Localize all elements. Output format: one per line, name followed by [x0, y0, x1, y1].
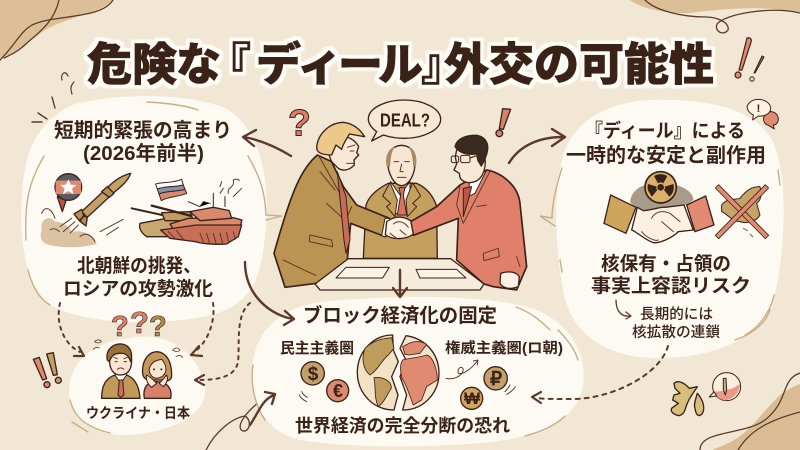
arrow: down to bloc economy — [393, 270, 407, 297]
hand resting on table — [500, 272, 519, 288]
heading: fixed bloc economy: ブロック経済化の固定 — [303, 304, 497, 327]
rouble glyph: ₽ — [490, 369, 502, 390]
icon: worried man and woman — [93, 340, 183, 398]
icon: question marks: ? — [149, 311, 167, 343]
panel: Ukraine and Japan — [33, 305, 205, 435]
text: in the long term: 長期的には — [640, 306, 713, 323]
text: de facto recognition risk: 事実上容認リスク — [591, 275, 751, 297]
icon: small map pieces and pin — [671, 373, 741, 416]
subheading: first half 2026: (2026年前半) — [83, 142, 204, 165]
arrowhead — [191, 346, 202, 356]
icon: tanks with Russian flag — [132, 179, 242, 244]
text: fear of total division: 世界経済の完全分断の恐れ — [295, 416, 510, 436]
panel: temporary stability and side effects — [540, 99, 784, 358]
icon: title exclamation marks — [735, 38, 764, 81]
arrowhead — [74, 347, 84, 356]
text: nuclear proliferation chain: 核拡散の連鎖 — [632, 324, 721, 341]
arrowhead — [532, 392, 541, 403]
icon: question marks: ? — [111, 311, 129, 343]
arrowhead — [195, 375, 204, 385]
icon: rouble and won coins — [446, 360, 515, 409]
central figures: three leaders at a table — [274, 100, 527, 290]
arrow: dotted from side effects to bloc economy — [535, 346, 668, 399]
figure: man in coral suit — [411, 135, 527, 290]
icon: crossed-out map — [715, 185, 769, 239]
arrow: to short-term tension — [243, 130, 291, 156]
arrow: dotted to Japan from left panel — [194, 303, 214, 352]
icon: exclamation marks — [33, 353, 61, 388]
panel: fixed bloc economy — [251, 297, 584, 446]
table with papers — [315, 259, 484, 290]
text: nuclear possession and occupation: 核保有・占領の — [601, 253, 731, 275]
text: Russia offensive intensifies: ロシアの攻勢激化 — [63, 278, 213, 300]
speech bubble: DEAL? — [368, 100, 441, 141]
text: North Korea provocation: 北朝鮮の挑発、 — [77, 255, 201, 277]
title: 危険な『ディール』外交の可能性 — [87, 39, 714, 90]
icon: alert speech bubbles — [747, 99, 778, 129]
icon: question mark: ? — [288, 101, 311, 143]
icon: question marks — [111, 305, 167, 343]
label: democratic bloc: 民主主義圏 — [280, 339, 354, 357]
figure: man in tan suit — [274, 122, 390, 287]
euro glyph: € — [333, 381, 343, 401]
arrow: to globe panel — [250, 392, 275, 425]
icon: missile with North Korean flag pin — [41, 173, 131, 247]
arrow: from tension to bloc economy — [245, 262, 294, 325]
arrow: to temporary stability — [509, 129, 565, 163]
label: Ukraine and Japan: ウクライナ・日本 — [86, 405, 190, 421]
icon: alert speech bubbles: ! — [757, 103, 760, 115]
arrow: dotted from globe panel to Japan — [198, 303, 250, 380]
icon: handshake with nuclear symbol — [604, 172, 714, 243]
handshake — [385, 217, 413, 239]
dollar glyph: $ — [308, 364, 319, 385]
won glyph: ₩ — [464, 389, 481, 408]
heading: stability and side effects: 一時的な安定と副作用 — [566, 144, 766, 167]
heading: deal brings temporary stability: 『ディール』による — [585, 119, 745, 142]
arrow: to nuclear chain text — [616, 300, 631, 319]
figure: man in the back — [363, 145, 437, 258]
label: authoritarian bloc: 権威主義圏(ロ朝) — [445, 339, 563, 357]
arrow: dotted to Ukraine from left — [59, 303, 80, 352]
panel: short-term tension — [21, 96, 282, 322]
speech bubble: DEAL?: DEAL? — [380, 110, 430, 131]
icon: broken globe — [357, 335, 439, 410]
icon: dollar and euro coins — [299, 362, 349, 402]
heading: short-term tension: 短期的緊張の高まり — [54, 119, 232, 142]
icon: exclamation mark — [496, 109, 511, 137]
icon: question marks: ? — [130, 305, 149, 340]
